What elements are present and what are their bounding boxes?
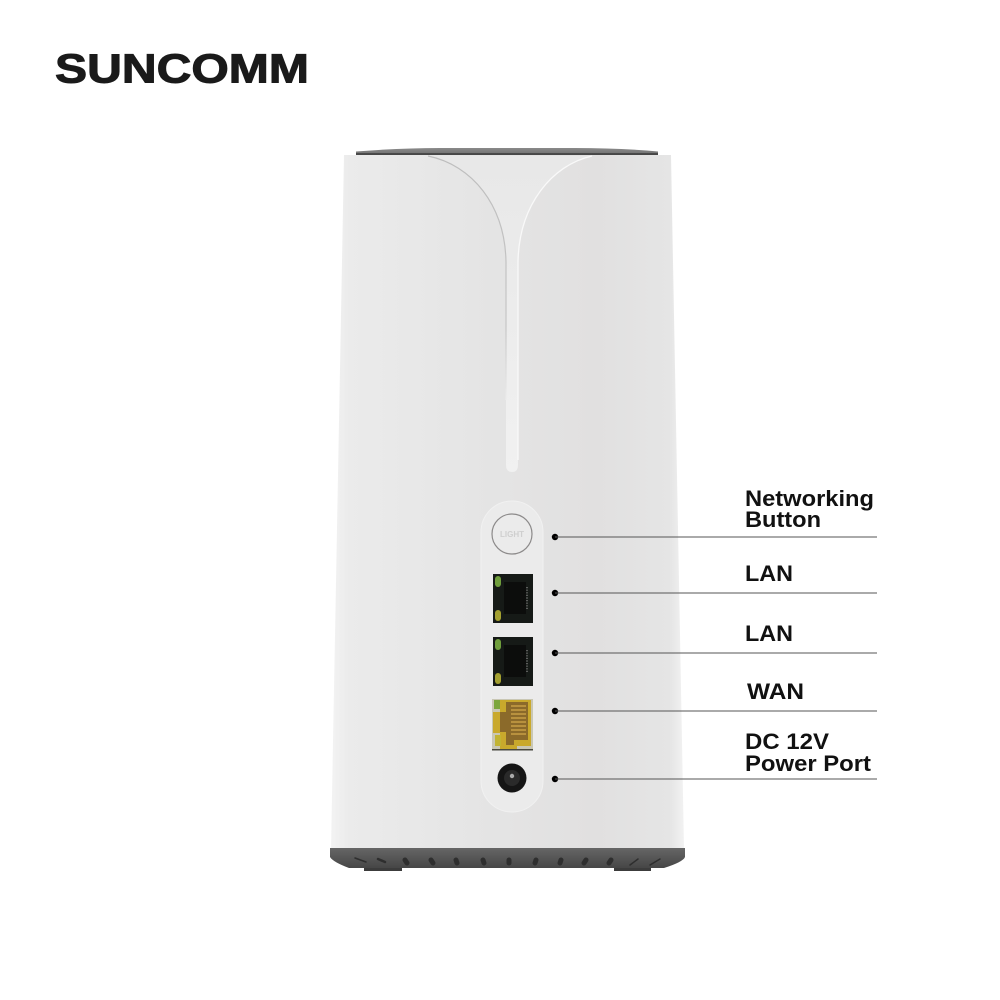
front groove (428, 156, 592, 472)
callout: LAN 2 (552, 621, 877, 656)
callout: LAN 2: LAN (745, 621, 793, 646)
LAN port 1 (493, 574, 533, 623)
router body (331, 155, 684, 849)
callout: LAN 1 (552, 561, 877, 596)
light button: LIGHT (500, 530, 524, 539)
callout: WAN: WAN (747, 679, 804, 704)
callout: Networking Button: Networking (745, 486, 874, 511)
logo: SUNCOMM: SUNCOMM (55, 46, 309, 92)
callout: DC 12V Power Port: DC 12V (745, 729, 829, 754)
LAN port 2 (493, 637, 533, 686)
callout: Networking Button (552, 486, 877, 540)
callout: LAN 1: LAN (745, 561, 793, 586)
router base (330, 848, 685, 871)
router top cap (356, 148, 658, 156)
WAN port (492, 699, 533, 750)
DC power jack (498, 764, 526, 792)
callout: Networking Button: Button (745, 507, 821, 532)
port panel (481, 501, 543, 812)
callout: DC 12V Power Port (552, 729, 877, 782)
callout: WAN (552, 679, 877, 714)
light button (492, 514, 532, 554)
router (330, 148, 685, 871)
callout: DC 12V Power Port: Power Port (745, 751, 872, 776)
base vents (355, 858, 660, 865)
